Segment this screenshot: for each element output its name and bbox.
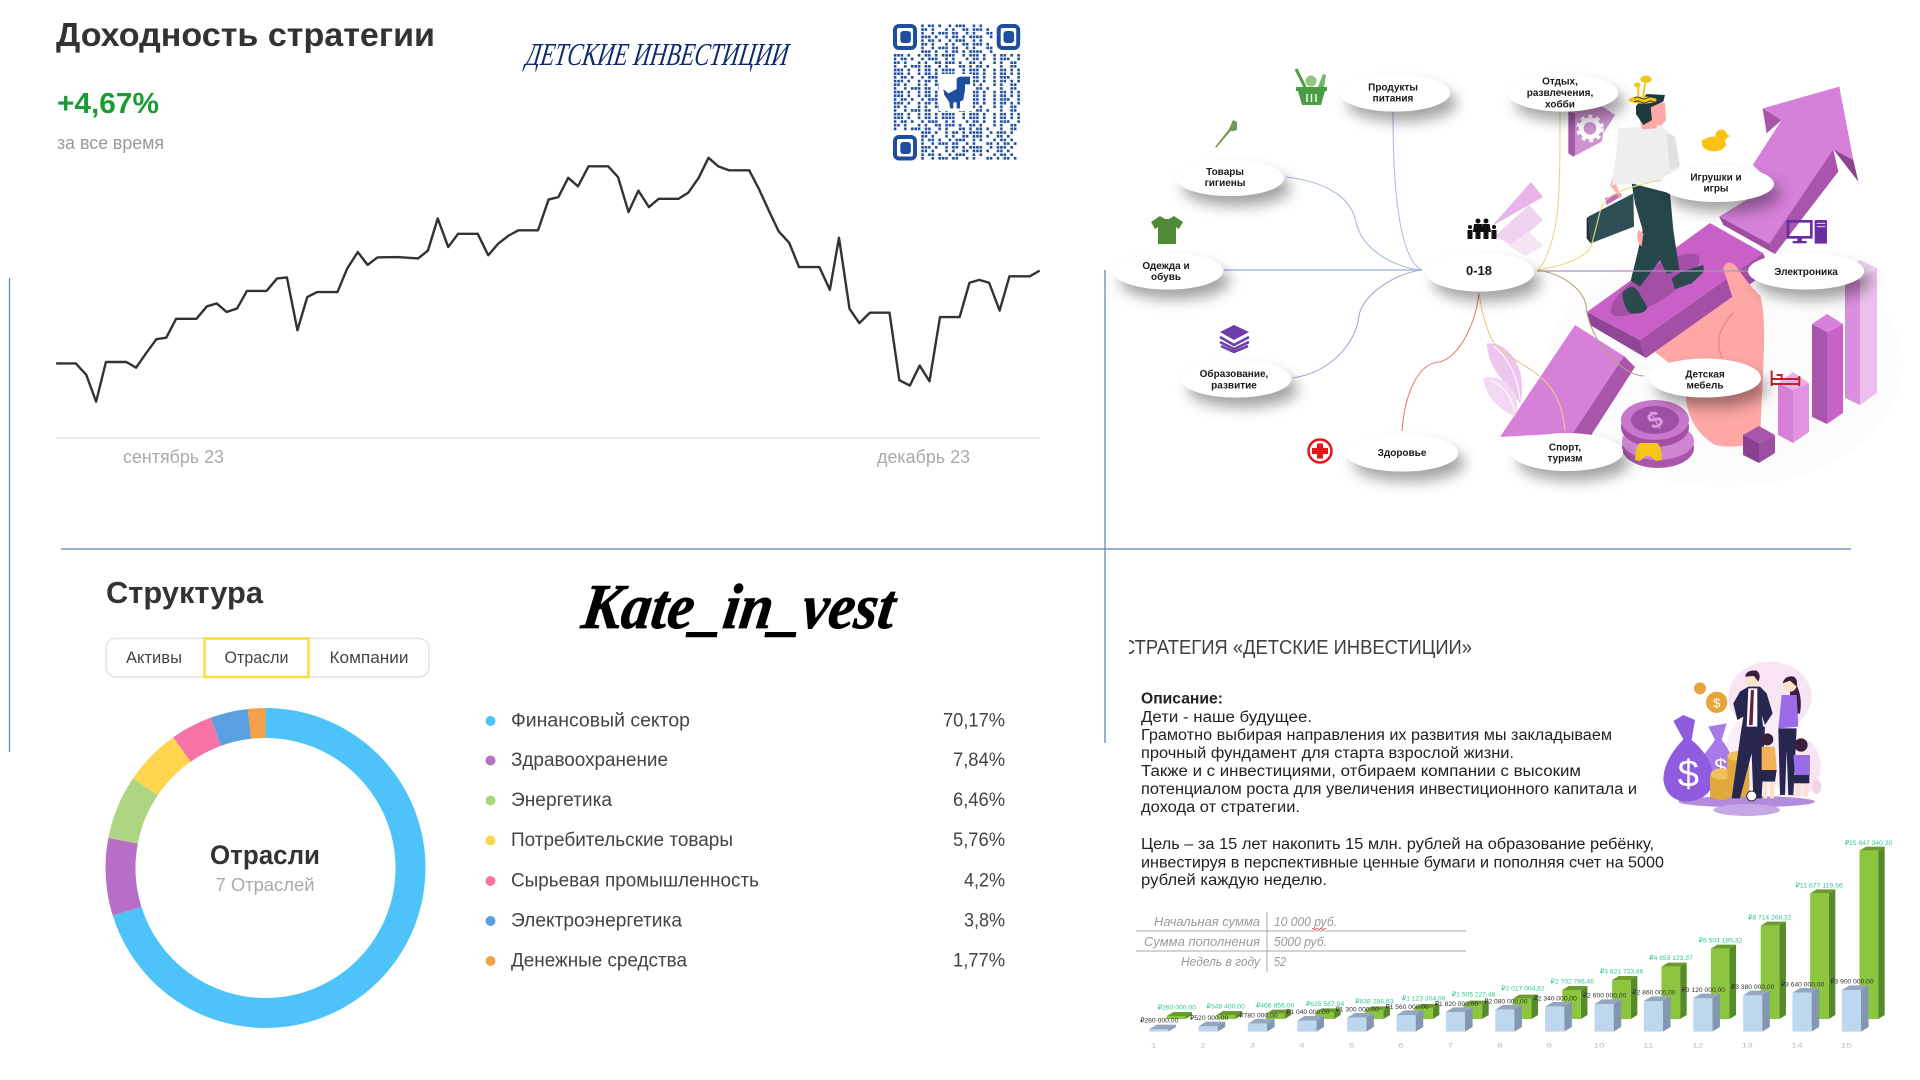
icon: books xyxy=(1220,325,1249,352)
x-axis years: 6 xyxy=(1398,1041,1404,1049)
node labels: мебель xyxy=(1686,380,1724,392)
node labels: игры xyxy=(1704,184,1728,194)
labels: contribution values: ₽1 300 000,00 xyxy=(1336,1005,1379,1013)
icon: gamepad xyxy=(1635,443,1662,461)
donut center label: Отрасли xyxy=(210,840,320,870)
period note: за все время xyxy=(57,133,164,153)
legend: 4,2% xyxy=(964,870,1005,892)
node labels: хобби xyxy=(1545,98,1575,110)
illustration: lower arrow shaft xyxy=(1500,325,1635,437)
legend: 3,8% xyxy=(964,910,1005,932)
legend: 6,46% xyxy=(953,790,1005,811)
axis label: september: сентябрь 23 xyxy=(123,447,224,467)
labels: capital values: ₽625 587,04 xyxy=(1306,1000,1344,1008)
labels: capital values: ₽3 621 733,86 xyxy=(1600,967,1644,975)
description text: Также и с инвестициями, отбираем компании с высоким xyxy=(1141,763,1581,780)
heading: structure: Структура xyxy=(106,575,264,610)
tabs: Компании xyxy=(330,648,408,667)
parameters table: 5000 руб. xyxy=(1274,934,1327,949)
parameters table: Недель в году xyxy=(1181,954,1261,969)
heading: strategy name: СТРАТЕГИЯ «ДЕТСКИЕ ИНВЕСТИЦИИ» xyxy=(1122,637,1472,659)
return value: +4,67% xyxy=(57,88,159,120)
bars: capital with returns xyxy=(1167,847,1885,1019)
node labels: развитие xyxy=(1211,380,1257,392)
illustration: walkway step xyxy=(1587,223,1770,358)
labels: contribution values: ₽3 640 000,00 xyxy=(1781,980,1824,988)
legend: Здравоохранение xyxy=(511,750,668,771)
x-axis years: 12 xyxy=(1692,1041,1704,1049)
node labels: 0-18 xyxy=(1466,263,1492,278)
illustration: family with money bags xyxy=(1663,662,1821,816)
x-axis years: 3 xyxy=(1250,1041,1256,1049)
illustration: paper triangles xyxy=(1492,182,1543,256)
legend: 7,84% xyxy=(953,750,1005,771)
panel: strategy description xyxy=(1106,634,1821,972)
labels: contribution values: ₽780 000,00 xyxy=(1239,1011,1278,1019)
illustration: gear folder xyxy=(1568,106,1615,157)
labels: contribution values: ₽2 340 000,00 xyxy=(1534,994,1577,1002)
parameters table: 52 xyxy=(1274,954,1287,969)
labels: contribution values: ₽3 120 000,00 xyxy=(1682,986,1725,994)
node labels: Спорт, xyxy=(1549,442,1581,454)
labels: contribution values xyxy=(1140,977,1874,1024)
icon: rubber duck xyxy=(1702,130,1730,151)
labels: capital values: ₽4 853 123,37 xyxy=(1649,954,1693,962)
tabs: Отрасли xyxy=(224,648,288,667)
legend: Электроэнергетика xyxy=(511,910,682,932)
signature: Kate_in_vest: Kate_in_vest xyxy=(577,571,902,642)
tabs xyxy=(106,638,429,677)
illustration: large upper arrow xyxy=(1719,87,1858,254)
node labels: Отдых, xyxy=(1542,76,1578,88)
icon: family xyxy=(1468,218,1496,239)
illustration: cube xyxy=(1743,426,1775,463)
description text: рублей каждую неделю. xyxy=(1141,872,1327,889)
icon: toothbrush xyxy=(1215,120,1237,148)
illustration: family with money bags: $ xyxy=(1678,753,1699,796)
x-axis years: 9 xyxy=(1546,1041,1552,1049)
tabs: Активы xyxy=(126,648,182,667)
x-axis years: 15 xyxy=(1841,1041,1852,1049)
icon: QR code xyxy=(893,26,1020,159)
labels: capital values: ₽348 400,00 xyxy=(1207,1002,1245,1010)
parameters table: Сумма пополнения xyxy=(1144,934,1260,949)
description text: Цель – за 15 лет накопить 15 млн. рублей на образование ребёнку, xyxy=(1141,836,1654,853)
description text: дохода от стратегии. xyxy=(1141,799,1300,816)
description text: Грамотно выбирая направления их развития мы закладываем xyxy=(1141,727,1612,744)
node labels: гигиены xyxy=(1205,178,1245,189)
labels: contribution values: ₽520 000,00 xyxy=(1190,1014,1228,1022)
labels: contribution values: ₽2 860 000,00 xyxy=(1632,988,1676,996)
description text xyxy=(1141,690,1664,889)
illustration: walking man xyxy=(1587,76,1704,314)
node labels: Детская xyxy=(1685,370,1725,380)
legend: Денежные средства xyxy=(511,950,687,972)
labels: contribution values: ₽1 560 000,00 xyxy=(1385,1003,1429,1011)
labels: capital values: ₽1 505 227,48 xyxy=(1452,990,1495,998)
illustration: finger xyxy=(1723,262,1760,305)
illustration: family with money bags: $ xyxy=(1714,754,1727,780)
labels: contribution values: ₽3 380 000,00 xyxy=(1731,983,1775,991)
x-axis years: 13 xyxy=(1742,1041,1753,1049)
panel: portfolio structure xyxy=(106,575,1005,1013)
illustration: coin stack: $ xyxy=(1643,405,1668,435)
node labels: туризм xyxy=(1548,454,1582,464)
script title: children's investments: ДЕТСКИЕ ИНВЕСТИЦИИ xyxy=(522,36,793,72)
description text: прочный фундамент для старта взрослой жизни. xyxy=(1141,745,1514,762)
x-axis years: 14 xyxy=(1791,1041,1803,1049)
node labels: Здоровье xyxy=(1378,448,1427,459)
x-axis years: 11 xyxy=(1643,1041,1654,1049)
icon: bed xyxy=(1772,371,1799,386)
labels: contribution values: ₽2 080 000,00 xyxy=(1484,997,1528,1005)
labels: contribution values: ₽2 600 000,00 xyxy=(1583,991,1626,999)
panel: spending mind map illustration xyxy=(1113,69,1903,487)
labels: capital values: ₽260 000,00 xyxy=(1158,1003,1196,1011)
labels: capital values: ₽838 286,63 xyxy=(1355,997,1394,1005)
x-axis years xyxy=(1151,1041,1852,1049)
legend xyxy=(486,710,1005,972)
line chart: return over time xyxy=(56,158,1040,402)
donut chart: sectors xyxy=(120,723,410,1013)
node labels: питания xyxy=(1373,94,1413,104)
illustration: hand crease xyxy=(1719,313,1733,358)
x-axis years: 7 xyxy=(1448,1041,1454,1049)
legend: 1,77% xyxy=(953,950,1005,972)
x-axis years: 2 xyxy=(1200,1041,1206,1049)
bar chart: contributions and capital over 15 years xyxy=(1140,839,1892,1049)
bars: contributions xyxy=(1149,985,1869,1032)
illustration: growing bars xyxy=(1778,260,1877,443)
labels: capital values: ₽6 503 185,32 xyxy=(1699,936,1742,944)
labels: capital values: ₽11 677 119,56 xyxy=(1796,881,1843,889)
node bubbles xyxy=(1113,74,1864,472)
description text: инвестируя в перспективные ценные бумаги и пополняя счет на 5000 xyxy=(1141,854,1664,872)
labels: contribution values: ₽1 820 000,00 xyxy=(1435,1000,1478,1008)
legend: 5,76% xyxy=(953,830,1005,851)
parameters table: Начальная сумма xyxy=(1154,914,1260,929)
x-axis years: 1 xyxy=(1151,1041,1157,1049)
node labels: Продукты xyxy=(1368,82,1418,94)
labels: capital values: ₽2 017 004,82 xyxy=(1501,984,1545,992)
x-axis years: 8 xyxy=(1497,1041,1503,1049)
panel: strategy return xyxy=(56,16,1040,467)
labels: contribution values: ₽1 040 000,00 xyxy=(1286,1008,1330,1016)
x-axis years: 4 xyxy=(1299,1041,1305,1049)
labels: contribution values: ₽260 000,00 xyxy=(1140,1016,1179,1024)
labels: capital values: ₽1 123 304,09 xyxy=(1402,994,1446,1002)
icon: grocery basket xyxy=(1296,69,1327,105)
legend: 70,17% xyxy=(943,710,1005,732)
description text: Дети - наше будущее. xyxy=(1141,709,1312,726)
icon: computer xyxy=(1788,220,1827,244)
labels: capital values xyxy=(1158,839,1892,1011)
legend: Потребительские товары xyxy=(511,830,733,851)
illustration: hand xyxy=(1655,295,1764,447)
node labels: Игрушки и xyxy=(1690,172,1742,184)
parameters table: 10 000 руб. xyxy=(1274,914,1337,929)
donut center sublabel: 7 Отраслей xyxy=(216,875,314,895)
chart axis xyxy=(56,437,1040,439)
node labels: обувь xyxy=(1151,271,1181,283)
heading: strategy return: Доходность стратегии xyxy=(56,16,435,53)
illustration: coin stack xyxy=(1621,400,1694,468)
labels: capital values: ₽466 856,00 xyxy=(1256,1001,1294,1009)
legend: Энергетика xyxy=(511,790,612,811)
labels: capital values: ₽8 714 268,32 xyxy=(1748,913,1792,921)
labels: contribution values: ₽3 900 000,00 xyxy=(1830,977,1874,985)
x-axis years: 5 xyxy=(1349,1041,1355,1049)
node labels: Образование, xyxy=(1200,368,1269,380)
icon: health cross xyxy=(1308,440,1332,462)
node labels xyxy=(1142,76,1838,464)
axis label: december: декабрь 23 xyxy=(877,447,970,467)
parameters table xyxy=(1136,912,1466,972)
illustration: plant leaves xyxy=(1483,343,1522,417)
x-axis years: 10 xyxy=(1593,1041,1605,1049)
legend: Финансовый сектор xyxy=(511,710,690,732)
node labels: Одежда и xyxy=(1142,261,1190,272)
node labels: Электроника xyxy=(1774,267,1838,278)
description text: потенциалом роста для увеличения инвестиционного капитала и xyxy=(1141,781,1637,798)
icon: t-shirt xyxy=(1151,216,1183,244)
mind map connectors xyxy=(1224,112,1748,431)
illustration: family with money bags: $ xyxy=(1713,695,1721,710)
node labels: развлечения, xyxy=(1527,88,1593,99)
description text: Описание: xyxy=(1141,690,1223,708)
node labels: Товары xyxy=(1206,167,1244,178)
legend: Сырьевая промышленность xyxy=(511,870,759,892)
labels: capital values: ₽2 702 786,46 xyxy=(1551,977,1594,985)
labels: capital values: ₽15 647 340,20 xyxy=(1845,839,1892,847)
